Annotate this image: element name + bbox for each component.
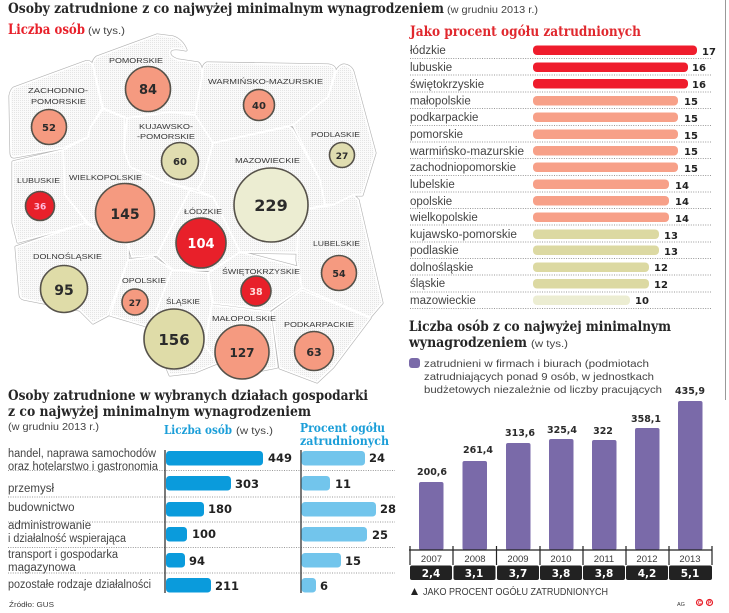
bar chart: percent by voivodeship: podkarpackie [410,112,478,124]
column chart: people by year: 261,4 [463,445,493,456]
legend: zatrudniających ponad 9 osób, w jednostkach [424,371,654,383]
column chart: people by year: 2012 [636,554,658,565]
heading: employment by sector [8,388,368,433]
column chart: people by year: 5,1 [681,568,699,580]
map of voivodeships: 63 [306,346,322,359]
bar chart: percent by voivodeship: świętokrzyskie [410,79,484,91]
map of voivodeships: 40 [252,101,266,112]
bar charts: sectors: 24 [369,451,385,465]
bar charts: sectors: 100 [192,527,216,541]
bar chart: percent by voivodeship: mazowieckie [410,295,476,307]
column heading: percent of employed [300,421,389,448]
column chart: people by year: 2,4 [422,568,440,580]
bar charts: sectors: 25 [372,528,388,542]
bar charts: sectors: 180 [208,502,232,516]
bar chart: percent by voivodeship: 15 [684,164,698,175]
map of voivodeships: DOLNOŚLĄSKIE [33,252,102,261]
map of voivodeships: 104 [187,237,215,252]
column heading: percent of employed: Procent ogółu [300,421,385,435]
bar chart: percent by voivodeship: 17 [702,47,716,58]
bar chart: percent by voivodeship: 16 [692,80,706,91]
bar charts: sectors: 11 [335,477,351,491]
bar chart: percent by voivodeship: 14 [675,214,689,225]
map of voivodeships: 156 [158,331,190,349]
map of voivodeships: LUBELSKIE [313,239,360,248]
bar chart: percent by voivodeship: 15 [684,147,698,158]
column chart: people by year: 4,2 [638,568,656,580]
map of voivodeships: 27 [129,299,141,309]
title: (w grudniu 2013 r.) [447,4,538,16]
map of voivodeships: OPOLSKIE [122,276,166,285]
source note: Źródło: GUS [9,600,54,609]
bar chart: percent by voivodeship: 16 [692,63,706,74]
bar chart: percent by voivodeship: małopolskie [410,96,471,108]
title: Osoby zatrudnione z co najwyżej minimalnym wynagrodzeniem [8,1,444,17]
bar chart: percent by voivodeship: opolskie [410,196,452,208]
map of voivodeships: 145 [110,207,140,223]
credit marks: P [708,600,712,606]
legend [409,358,662,396]
bar chart: percent by voivodeship: 14 [675,181,689,192]
heading: employment by sector: z co najwyżej minimalnym wynagrodzeniem [8,404,311,420]
bar chart: percent by voivodeship: lubuskie [410,62,452,74]
bar charts: sectors: 6 [320,579,328,593]
column heading: number of people: (w tys.) [236,425,273,437]
bar chart: percent by voivodeship [409,45,716,308]
map of voivodeships: 95 [54,283,74,299]
column chart: people by year: 325,4 [547,425,577,436]
column chart: people by year: 2008 [464,554,486,565]
map of voivodeships: ŚWIĘTOKRZYSKIE [222,267,300,276]
column chart: people by year: 2011 [594,554,614,565]
map of voivodeships: 52 [42,123,56,134]
column chart: people by year: 3,1 [465,568,483,580]
bar chart: percent by voivodeship: zachodniopomorskie [410,162,516,174]
bar chart: percent by voivodeship: łódzkie [410,45,446,57]
bar charts: sectors: oraz hotelarstwo i gastronomia [8,461,159,473]
map of voivodeships: MAŁOPOLSKIE [212,314,276,323]
map of voivodeships: -POMORSKIE [137,132,195,141]
bar chart: percent by voivodeship: 13 [664,231,678,242]
bar charts: sectors: pozostałe rodzaje działalności [8,579,151,591]
column chart: people by year: 3,8 [595,568,613,580]
map of voivodeships: POMORSKIE [109,56,163,65]
legend: budżetowych niezależnie od liczby pracujących [424,384,662,396]
heading: number of people map: (w tys.) [88,25,125,37]
column chart: people by year: 3,8 [552,568,570,580]
map of voivodeships: 84 [139,83,157,98]
bar chart: percent by voivodeship: 12 [654,280,668,291]
map of voivodeships [10,35,382,382]
bar chart: percent by voivodeship: kujawsko-pomorskie [410,229,517,241]
bar charts: sectors [8,448,396,593]
bar chart: percent by voivodeship: dolnośląskie [410,262,473,274]
heading: number of people over time: wynagrodzeniem [408,335,527,351]
bar charts: sectors: 15 [345,554,361,568]
bar chart: percent by voivodeship: podlaskie [410,245,459,257]
bar charts: sectors: transport i gospodarka [8,549,119,561]
bar charts: sectors: i działalność wspierająca [8,533,127,545]
bar charts: sectors: 94 [189,554,205,568]
heading: number of people over time: Liczba osób z co najwyżej minimalnym [409,319,671,335]
bar chart: percent by voivodeship: warmińsko-mazurskie [409,146,524,158]
bar chart: percent by voivodeship: wielkopolskie [409,212,478,224]
bar charts: sectors: 211 [215,579,239,593]
map of voivodeships: 229 [254,196,288,215]
percent legend with triangle: JAKO PROCENT OGÓŁU ZATRUDNIONYCH [423,585,608,598]
bar charts: sectors: 303 [235,477,259,491]
column chart: people by year [409,386,712,580]
map of voivodeships: PODKARPACKIE [284,320,354,329]
heading: employment by sector: Osoby zatrudnione w wybranych działach gospodarki [8,388,368,404]
column chart: people by year: 3,7 [509,568,527,580]
heading: percent of employed: Jako procent ogółu zatrudnionych [409,24,641,40]
column chart: people by year: 313,6 [505,428,535,439]
heading: employment by sector: (w grudniu 2013 r.) [8,421,99,433]
map of voivodeships: ŁÓDZKIE [184,207,222,216]
heading: number of people map: Liczba osób [8,22,85,38]
map of voivodeships: MAZOWIECKIE [235,156,300,165]
map of voivodeships: 54 [332,269,346,280]
column chart: people by year: 435,9 [675,386,705,397]
bar charts: sectors: 449 [268,451,292,465]
heading: number of people over time [408,319,671,351]
bar chart: percent by voivodeship: 15 [684,131,698,142]
bar charts: sectors: budownictwo [8,502,74,514]
column chart: people by year: 200,6 [417,467,447,478]
column chart: people by year: 322 [593,426,613,437]
bar chart: percent by voivodeship: 13 [664,247,678,258]
heading: number of people over time: (w tys.) [531,338,568,350]
column chart: people by year: 2007 [421,554,442,565]
bar chart: percent by voivodeship: śląskie [410,278,445,290]
map of voivodeships: PODLASKIE [311,130,360,139]
column chart: people by year: 2010 [550,554,572,565]
map of voivodeships: 27 [336,152,348,162]
bar chart: percent by voivodeship: lubelskie [410,179,455,191]
column heading: percent of employed: zatrudnionych [300,434,389,448]
credit marks: AG [677,602,685,608]
map of voivodeships: WIELKOPOLSKIE [69,173,142,182]
bar chart: percent by voivodeship: 12 [654,263,668,274]
column chart: people by year: 358,1 [631,414,661,425]
map of voivodeships: 127 [229,346,255,360]
bar charts: sectors: handel, naprawa samochodów [8,448,157,460]
legend: zatrudnieni w firmach i biurach (podmiotach [424,358,649,370]
map of voivodeships: KUJAWSKO- [139,122,194,131]
map of voivodeships: 38 [249,287,263,298]
bar chart: percent by voivodeship: 15 [684,114,698,125]
map of voivodeships: WARMIŃSKO-MAZURSKIE [208,77,323,86]
map of voivodeships: 60 [173,157,187,168]
bar chart: percent by voivodeship: 15 [684,97,698,108]
map of voivodeships: POMORSKIE [31,97,86,106]
column chart: people by year: 2009 [507,554,529,565]
column chart: people by year: 2013 [679,554,701,565]
bar charts: sectors: przemysł [8,483,54,495]
map of voivodeships: ŚLĄSKIE [166,297,200,306]
column heading: number of people: Liczba osób [164,423,232,437]
map of voivodeships: 36 [34,202,46,212]
map of voivodeships: ZACHODNIO- [28,86,89,95]
bar chart: percent by voivodeship: 14 [675,197,689,208]
bar charts: sectors: administrowanie [8,520,91,532]
bar charts: sectors: 28 [380,502,396,516]
map of voivodeships: LUBUSKIE [17,176,60,185]
credit marks: C [698,600,702,606]
bar chart: percent by voivodeship: 10 [635,296,649,307]
bar charts: sectors: magazynowa [8,562,76,574]
credit marks [677,600,712,608]
bar chart: percent by voivodeship: pomorskie [410,129,463,141]
